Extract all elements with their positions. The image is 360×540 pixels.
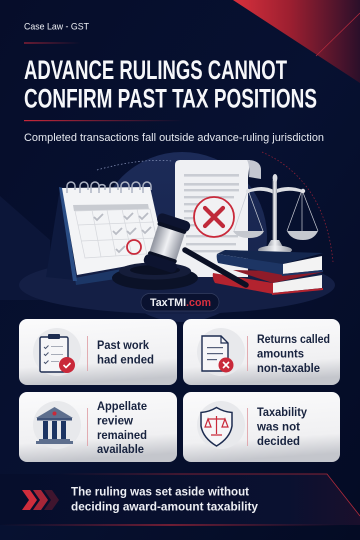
icon: stacked law books	[213, 250, 323, 295]
card text: non-taxable	[257, 361, 320, 375]
card text: Appellate	[97, 399, 147, 413]
title	[24, 55, 317, 114]
icon: shield with scales	[201, 408, 232, 446]
banner text	[71, 484, 258, 514]
card text: amounts	[257, 346, 304, 360]
card text: available	[97, 442, 144, 456]
icon: judge's gavel	[112, 212, 246, 290]
card text: Past work	[97, 338, 149, 352]
card text	[97, 338, 154, 366]
card text: review	[97, 414, 134, 428]
card: taxability was not decided	[183, 392, 340, 462]
logo badge: TaxTMI.com	[150, 297, 211, 309]
conclusion banner	[0, 474, 360, 526]
icon: balance scales	[233, 174, 318, 254]
red corner accent	[233, 0, 360, 83]
icon: document with cross	[202, 336, 234, 372]
card text	[97, 399, 147, 456]
card: past work had ended	[19, 319, 177, 385]
card text: had ended	[97, 352, 154, 366]
card text: decided	[257, 434, 300, 448]
icon: chevrons	[22, 490, 59, 510]
card text: Returns called	[257, 332, 330, 346]
logo badge	[141, 294, 219, 311]
card text	[256, 405, 307, 448]
subtitle: Completed transactions fall outside advance-ruling jurisdiction	[24, 132, 324, 144]
card: returns called amounts non-taxable	[183, 319, 340, 385]
banner text: deciding award-amount taxability	[71, 500, 258, 514]
icon: courthouse	[36, 407, 73, 444]
backdrop dome and platform	[0, 152, 335, 322]
icon: clipboard with check	[40, 334, 75, 373]
category label: Case Law - GST	[24, 22, 89, 32]
icon: scroll document with red cross	[175, 160, 261, 277]
card text: was not	[256, 420, 300, 434]
banner text: The ruling was set aside without	[71, 484, 249, 498]
card text: Taxability	[257, 405, 307, 419]
icon: desk calendar	[46, 182, 168, 285]
card text	[257, 332, 330, 375]
card text: remained	[97, 428, 147, 442]
card: appellate review remained available	[19, 392, 177, 462]
hero illustration	[0, 152, 335, 322]
